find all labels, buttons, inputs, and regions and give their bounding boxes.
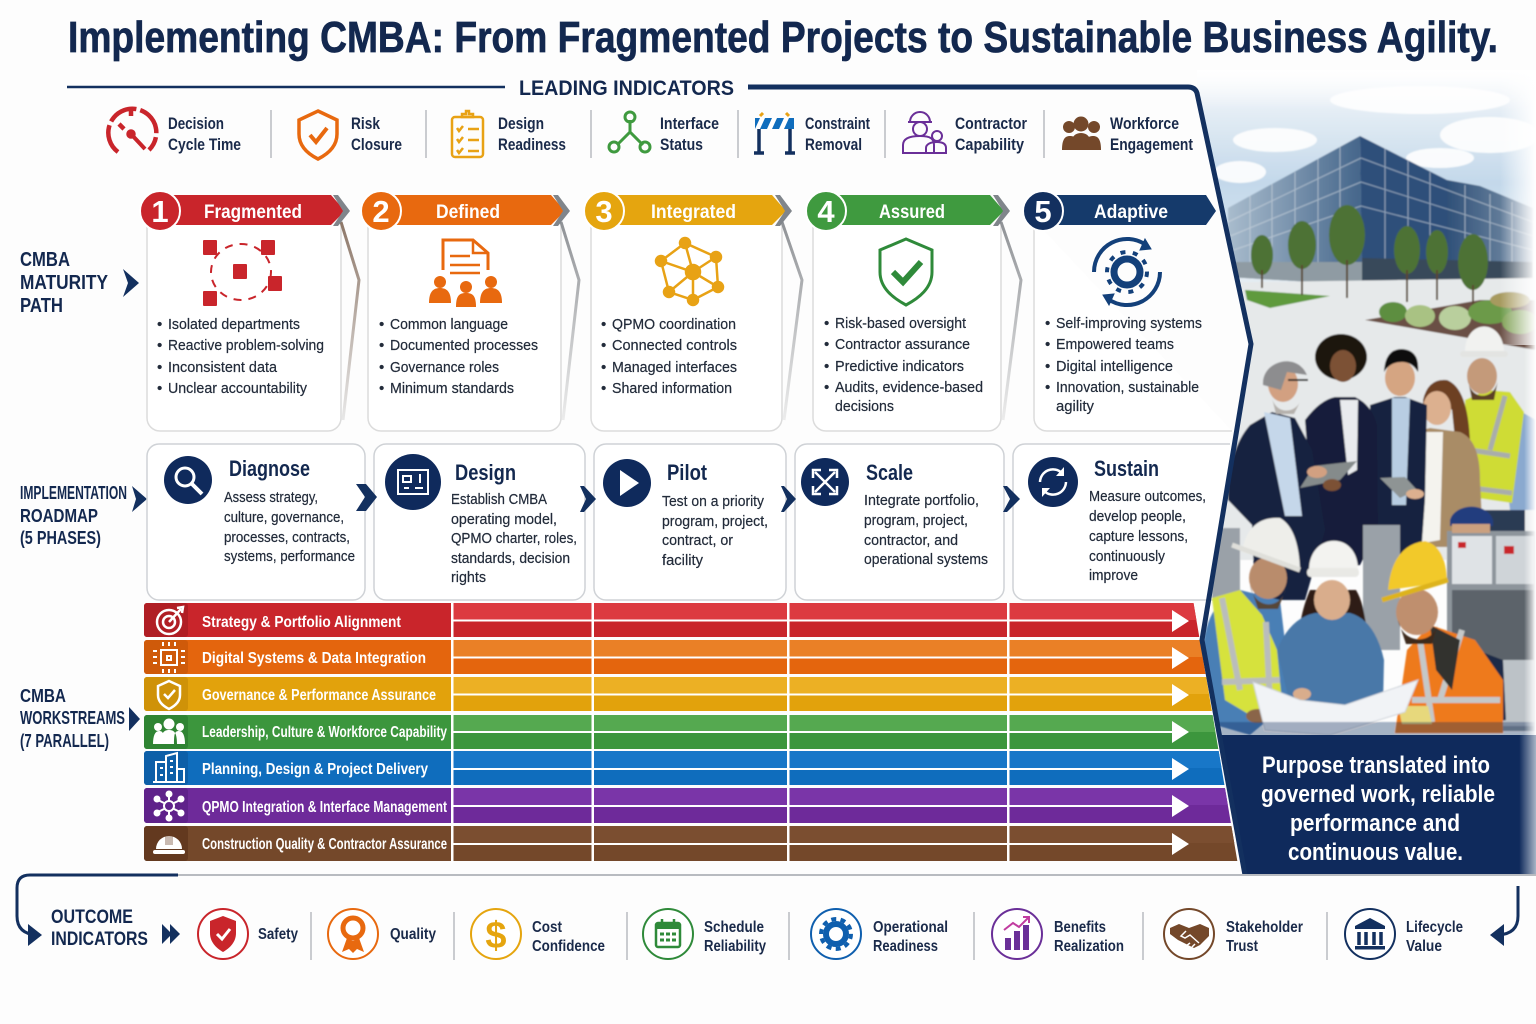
panel: pilot phase (594, 444, 786, 600)
bullet list: agility (1056, 398, 1094, 415)
workstream: strategy and portfolio alignment: Strategy & Portfolio Alignment (202, 614, 402, 631)
text: stakeholder trust: Trust (1226, 938, 1258, 955)
bullet list: Predictive indicators (835, 358, 964, 375)
building (1228, 136, 1533, 285)
description: facility (662, 552, 703, 569)
text: quality: Quality (390, 926, 436, 943)
description: Assess strategy, (224, 489, 318, 506)
label: Fragmented (204, 202, 302, 223)
text: constraint removal: Constraint (805, 114, 870, 133)
description: Integrate portfolio, (864, 492, 979, 509)
icon: expand (801, 458, 849, 506)
label: cmba workstreams: CMBA (20, 685, 66, 706)
chart: seven parallel workstreams (144, 603, 1244, 863)
text: operational readiness (873, 919, 948, 955)
workstream: qpmo integration and interface management (144, 788, 1244, 823)
icon: cost confidence: $ (485, 915, 507, 957)
text: decision cycle time (168, 114, 241, 154)
icon: cost confidence (471, 909, 521, 959)
header bar (165, 195, 345, 225)
panel: diagnose phase (147, 444, 365, 600)
bullet list: • (601, 359, 606, 376)
text: design readiness (498, 114, 566, 154)
worker in hi-vis (1508, 413, 1535, 512)
text: operational readiness: Operational (873, 919, 948, 936)
bullet list: Minimum standards (390, 380, 514, 397)
background skyline (1212, 525, 1400, 650)
description (451, 491, 577, 586)
bullet list: Unclear accountability (168, 380, 307, 397)
icon: safety (198, 909, 248, 959)
bullet list: • (1045, 358, 1050, 375)
text: workforce engagement: Engagement (1110, 135, 1193, 154)
bullet list: Digital intelligence (1056, 358, 1173, 375)
text: decision cycle time: Cycle Time (168, 135, 241, 154)
panel: scale phase (795, 444, 1004, 600)
label: implementation roadmap: IMPLEMENTATION (20, 483, 127, 503)
icon: play (603, 459, 651, 507)
bullet list: • (824, 315, 829, 332)
bullet list: • (157, 380, 162, 397)
badge: 1 (140, 191, 180, 231)
heading: Design (455, 460, 516, 485)
text: safety: Safety (258, 926, 298, 943)
description: standards, decision (451, 550, 570, 567)
workstream: governance and performance assurance: Governance & Performance Assurance (202, 687, 436, 704)
description (224, 489, 355, 565)
frame: outcome connector (17, 875, 1536, 946)
badge: 3: 3 (595, 194, 613, 229)
bullet list: Common language (390, 316, 508, 333)
heading: Sustain (1094, 456, 1159, 481)
bullet list: • (1045, 379, 1050, 396)
label: implementation roadmap: (5 PHASES) (20, 528, 101, 548)
text: workforce engagement (1110, 114, 1193, 154)
bullet list: • (379, 380, 384, 397)
bullet list: Contractor assurance (835, 336, 970, 353)
text: contractor capability: Contractor (955, 114, 1027, 133)
bullet list: Reactive problem-solving (168, 337, 324, 354)
bullet list: • (824, 336, 829, 353)
text: interface status (660, 114, 719, 154)
label: outcome indicators (51, 906, 180, 950)
label: Integrated (651, 202, 736, 223)
bullet list (379, 316, 538, 397)
woman with tablet (1315, 334, 1367, 380)
description: contract, or (662, 532, 733, 549)
callout: purpose statement: performance and (1290, 810, 1460, 837)
description: Measure outcomes, (1089, 488, 1206, 505)
text: schedule reliability: Reliability (704, 938, 766, 955)
text: design readiness: Design (498, 114, 544, 133)
bullet list: Empowered teams (1056, 336, 1174, 353)
panel: level 5 adaptive (1023, 191, 1232, 431)
heading: Scale (866, 460, 913, 485)
text: cost confidence: Confidence (532, 938, 605, 955)
bullet list: • (157, 359, 162, 376)
bullet list: Governance roles (390, 359, 499, 376)
right worker (1484, 652, 1507, 722)
description: processes, contracts, (224, 529, 350, 546)
text: workforce engagement: Workforce (1110, 114, 1179, 133)
bullet list: • (1045, 336, 1050, 353)
arrow: diagnose to design (356, 484, 377, 511)
icon: shield check (880, 239, 932, 305)
bullet list: • (824, 358, 829, 375)
header bar (385, 195, 565, 225)
icon: disconnected squares (203, 240, 282, 306)
bullet list: • (1045, 315, 1050, 332)
bullet list (824, 315, 983, 415)
workstream: planning, design and project delivery: Planning, Design & Project Delivery (202, 761, 428, 778)
bullet list: • (601, 316, 606, 333)
text: stakeholder trust (1226, 919, 1303, 955)
label: cmba workstreams (20, 685, 140, 751)
description: program, project, (662, 513, 768, 530)
description: operating model, (451, 511, 557, 528)
icon: decision cycle time gauge (108, 109, 156, 152)
panel: level 1 fragmented (140, 191, 359, 431)
text: decision cycle time: Decision (168, 114, 224, 133)
description (662, 493, 768, 569)
text: contractor capability (955, 114, 1027, 154)
icon: blueprint (385, 454, 441, 510)
badge: 1: 1 (151, 194, 169, 229)
label: Assured (879, 202, 945, 223)
icon: lifecycle value (1345, 909, 1395, 959)
icon: constraint removal barrier (754, 113, 795, 153)
panel: level 2 defined (361, 191, 579, 431)
badge: 5 (1023, 191, 1063, 231)
label: Adaptive (1094, 202, 1168, 223)
text: constraint removal: Removal (805, 135, 862, 154)
description: contractor, and (864, 532, 958, 549)
text: interface status: Status (660, 135, 703, 154)
description: capture lessons, (1089, 528, 1188, 545)
icon: stakeholder trust handshake (1164, 909, 1214, 959)
badge: 2: 2 (372, 194, 390, 229)
frame: navy chevron border (748, 87, 1251, 875)
callout: purpose statement (1261, 752, 1495, 866)
icon: design readiness checklist (452, 111, 483, 157)
icon: workforce engagement people (1062, 116, 1101, 150)
description (1089, 488, 1206, 584)
left worker (1203, 590, 1292, 735)
callout: purpose statement: governed work, reliable (1261, 781, 1495, 808)
back row team (1228, 326, 1536, 600)
text: operational readiness: Readiness (873, 938, 938, 955)
workstream: qpmo integration and interface management: QPMO Integration & Interface Management (202, 799, 448, 816)
ground (1190, 278, 1536, 560)
panel: level 4 assured (806, 191, 1021, 431)
arrow: design to pilot (580, 486, 596, 512)
heading: Diagnose (229, 456, 310, 481)
bullet list (1045, 315, 1202, 415)
icon: operational readiness (811, 909, 861, 959)
bullet list: • (157, 316, 162, 333)
badge: 2 (361, 191, 401, 231)
heading: Pilot (667, 460, 708, 485)
text: schedule reliability: Schedule (704, 919, 764, 936)
hands (1245, 708, 1263, 724)
icon: cycle (1028, 457, 1078, 507)
front row workers (1203, 518, 1506, 735)
workstream: leadership, culture and workforce capability: Leadership, Culture & Workforce Capability (202, 724, 447, 741)
label: cmba maturity path (20, 249, 139, 317)
bullet list: • (379, 337, 384, 354)
callout background (1200, 735, 1536, 877)
label: implementation roadmap (20, 483, 147, 548)
image: building and team photo scene (1190, 70, 1536, 877)
man in suit (1370, 397, 1427, 570)
bullet list: Shared information (612, 380, 732, 397)
icon: schedule reliability (643, 909, 693, 959)
icon: contractor capability people (903, 112, 946, 153)
label: outcome indicators: OUTCOME (51, 906, 133, 928)
bullet list: QPMO coordination (612, 316, 736, 333)
bullet list: decisions (835, 398, 894, 415)
label: cmba workstreams: WORKSTREAMS (20, 707, 125, 728)
description: rights (451, 569, 486, 586)
icon: gear with cycle arrows (1094, 239, 1160, 305)
header bar (1050, 195, 1216, 225)
text: risk closure (351, 114, 402, 154)
bullet list (157, 316, 324, 397)
center worker (1300, 590, 1366, 624)
workstream: strategy and portfolio alignment (144, 603, 1244, 637)
description: improve (1089, 567, 1138, 584)
description: Test on a priority (662, 493, 764, 510)
text: interface status: Interface (660, 114, 719, 133)
header bar (608, 195, 786, 225)
description: program, project, (864, 512, 968, 529)
panel: design phase (374, 444, 585, 600)
callout: purpose statement: Purpose translated into (1262, 752, 1490, 779)
description (864, 492, 988, 568)
shade under people (1200, 722, 1536, 736)
text: stakeholder trust: Stakeholder (1226, 919, 1303, 936)
panel: leading indicators row (108, 109, 1193, 159)
label: cmba maturity path: CMBA (20, 249, 70, 271)
text: risk closure: Closure (351, 135, 402, 154)
label: cmba maturity path: MATURITY (20, 272, 109, 294)
text: risk closure: Risk (351, 114, 380, 133)
icon: quality (328, 909, 378, 959)
text: cost confidence: Cost (532, 919, 562, 936)
workstream: governance and performance assurance (144, 677, 1244, 711)
panel: sustain phase (1013, 444, 1230, 600)
bullet list: • (601, 337, 606, 354)
text: schedule reliability (704, 919, 766, 955)
arrow: scale to sustain (1003, 486, 1020, 512)
text: lifecycle value: Value (1406, 938, 1442, 955)
header bar (830, 195, 1004, 225)
heading: leading indicators: LEADING INDICATORS (519, 77, 734, 100)
bullet list: Self-improving systems (1056, 315, 1202, 332)
icon: magnifier (164, 456, 212, 504)
text: lifecycle value (1406, 919, 1463, 955)
equipment panels (1447, 507, 1536, 731)
bullet list: Documented processes (390, 337, 538, 354)
bullet list: • (601, 380, 606, 397)
bullet list (601, 316, 737, 397)
text: design readiness: Readiness (498, 135, 566, 154)
badge: 3 (584, 191, 624, 231)
workstream: digital systems and data integration: Digital Systems & Data Integration (202, 650, 426, 667)
icon: risk closure shield (299, 111, 337, 159)
trees and shrubs (1251, 205, 1536, 334)
icon: document and team (429, 240, 502, 307)
workstream: planning, design and project delivery (144, 751, 1244, 785)
text: benefits realization: Realization (1054, 938, 1124, 955)
workstream: leadership, culture and workforce capability (144, 715, 1244, 749)
text: constraint removal (805, 114, 870, 154)
bullet list: Isolated departments (168, 316, 300, 333)
workstream: construction quality and contractor assurance (144, 826, 1244, 861)
badge: 4 (806, 191, 846, 231)
tablets (1300, 461, 1357, 488)
label: implementation roadmap: ROADMAP (20, 506, 98, 526)
bullet list: Audits, evidence-based (835, 379, 983, 396)
bullet list: • (824, 379, 829, 396)
callout: purpose statement: continuous value. (1288, 839, 1463, 866)
arrow: pilot to scale (781, 486, 796, 512)
text: benefits realization (1054, 919, 1124, 955)
badge: 5: 5 (1034, 194, 1052, 229)
senior man in suit (1228, 412, 1325, 600)
description: continuously (1089, 548, 1165, 565)
label: outcome indicators: INDICATORS (51, 928, 148, 950)
bullet list: Connected controls (612, 337, 737, 354)
bullet list: Risk-based oversight (835, 315, 967, 332)
icon: interface status network (609, 112, 650, 152)
text: contractor capability: Capability (955, 135, 1024, 154)
workstream: construction quality and contractor assurance: Construction Quality & Contractor Assurance (202, 836, 447, 853)
badge: 4: 4 (817, 194, 835, 229)
text: benefits realization: Benefits (1054, 919, 1106, 936)
bullet list: Managed interfaces (612, 359, 737, 376)
description: develop people, (1089, 508, 1186, 525)
bullet list: Inconsistent data (168, 359, 278, 376)
bullet list: • (379, 316, 384, 333)
label: cmba workstreams: (7 PARALLEL) (20, 730, 109, 751)
description: Establish CMBA (451, 491, 547, 508)
bullet list: Innovation, sustainable (1056, 379, 1199, 396)
label: cmba maturity path: PATH (20, 295, 63, 317)
text: lifecycle value: Lifecycle (1406, 919, 1463, 936)
bullet list: • (157, 337, 162, 354)
bullet list: • (379, 359, 384, 376)
blueprint (1253, 680, 1418, 735)
panel: outcome indicators row (198, 909, 1463, 960)
icon: network hexagon (656, 238, 723, 305)
woman in tan blazer (1423, 380, 1470, 442)
label: Defined (436, 202, 500, 223)
description: systems, performance (224, 548, 355, 565)
icon: benefits realization (992, 909, 1042, 959)
workstream: digital systems and data integration (144, 640, 1244, 674)
text: cost confidence (532, 919, 605, 955)
description: culture, governance, (224, 509, 344, 526)
description: operational systems (864, 551, 988, 568)
panel: level 3 integrated (584, 191, 802, 431)
description: QPMO charter, roles, (451, 530, 577, 547)
